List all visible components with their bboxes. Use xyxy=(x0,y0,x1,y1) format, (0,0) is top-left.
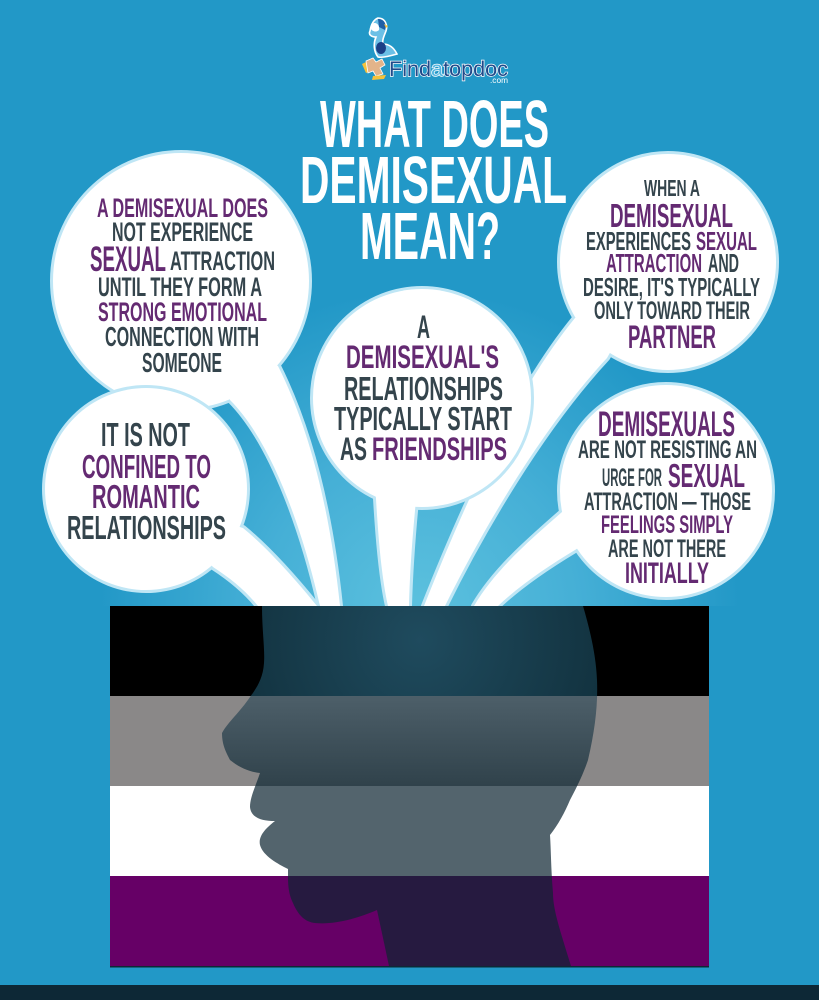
logo wordmark: Findatopdoc xyxy=(389,58,508,81)
background glow xyxy=(90,285,750,606)
footer bar xyxy=(0,985,819,1000)
bubble text: DEMISEXUAL'S xyxy=(346,339,499,375)
logo .com: .com xyxy=(490,76,508,85)
bubble text: CONFINED TO xyxy=(82,448,211,485)
bubble text: TYPICALLY START xyxy=(334,400,512,437)
bubble text: ROMANTIC xyxy=(92,478,200,515)
asexual pride flag xyxy=(110,606,709,968)
bubble text xyxy=(67,416,226,546)
bubble text: UNTIL THEY FORM A xyxy=(98,272,262,302)
title xyxy=(300,87,567,274)
logo: Findatopdoc xyxy=(362,18,508,85)
bubble text: EXPERIENCES xyxy=(586,226,691,256)
bubble text xyxy=(334,309,512,467)
bubble text xyxy=(583,175,760,355)
bubble text: WHEN A xyxy=(644,175,700,201)
bubble text: ARE NOT THERE xyxy=(608,535,726,563)
bubble text: SOMEONE xyxy=(142,347,222,378)
bubble text: SEXUAL xyxy=(668,457,745,494)
bubble text: SEXUAL xyxy=(90,240,166,279)
head silhouette xyxy=(222,606,598,966)
bubble text: PARTNER xyxy=(628,319,716,355)
title: DEMISEXUAL xyxy=(300,143,567,218)
bubble text xyxy=(90,193,275,378)
bubble text xyxy=(578,405,757,590)
title: WHAT DOES xyxy=(320,87,549,162)
bubble text: FRIENDSHIPS xyxy=(372,431,507,467)
bubble text: ATTRACTION xyxy=(606,248,702,278)
bubble text: FEELINGS SIMPLY xyxy=(601,511,733,539)
speech bubble: not resisting an urge xyxy=(474,385,772,606)
bubble text: CONNECTION WITH xyxy=(105,321,259,352)
speech bubble: only toward partner xyxy=(424,154,776,606)
bubble text: A xyxy=(417,309,430,345)
speech bubble: not confined to romantic relationships xyxy=(45,388,317,606)
bubble text: IT IS NOT xyxy=(101,416,190,453)
speech bubble: relationships start as friendships xyxy=(313,289,531,606)
bubble text: URGE FOR xyxy=(602,464,662,492)
bubble text: RELATIONSHIPS xyxy=(67,509,226,546)
bubble text: STRONG EMOTIONAL xyxy=(98,297,267,327)
speech bubble: not until emotional bond xyxy=(53,153,340,606)
icon: duck mascot xyxy=(362,18,397,80)
bubble text: AS xyxy=(340,431,367,467)
bubble text: SEXUAL xyxy=(696,226,757,256)
bubble text: INITIALLY xyxy=(625,557,709,590)
bubble text: NOT EXPERIENCE xyxy=(112,217,253,247)
bubble text: AND xyxy=(708,248,739,278)
bubble text: A DEMISEXUAL DOES xyxy=(97,193,268,223)
bubble text: RELATIONSHIPS xyxy=(344,370,503,407)
title: MEAN? xyxy=(360,199,500,274)
bubble text: ATTRACTION xyxy=(170,246,275,276)
